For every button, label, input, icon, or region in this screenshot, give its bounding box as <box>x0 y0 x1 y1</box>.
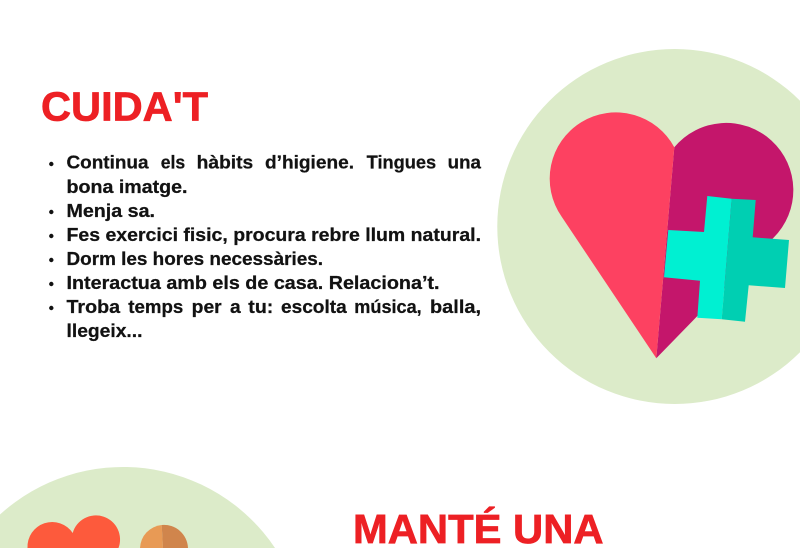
heart left half <box>550 112 674 358</box>
orange heart <box>27 515 120 548</box>
tip: interact: Interactua amb els de casa. Relaciona’t. <box>66 273 440 293</box>
tip: hygiene: una <box>448 153 482 173</box>
tip: time for yourself: per <box>192 297 222 317</box>
icon: bottom green circle with heart and head <box>0 467 275 548</box>
plus sign dark part <box>722 199 789 322</box>
heart right half <box>656 123 793 358</box>
tip: time for yourself: tu: <box>248 297 273 317</box>
tip: time for yourself: a <box>230 297 242 317</box>
tip: hygiene: els <box>161 153 185 173</box>
tip: time for yourself: temps <box>128 297 183 317</box>
tip: hygiene: hàbits <box>197 153 253 173</box>
green circle <box>0 467 275 548</box>
bullet list: self-care tips <box>49 153 482 341</box>
bullet markers <box>49 162 54 310</box>
tip: healthy food: Menja sa. <box>66 201 155 221</box>
tip: time for yourself: balla, <box>430 297 481 317</box>
tip: time for yourself: Troba <box>66 297 121 317</box>
tip: time for yourself: escolta <box>281 297 348 317</box>
tip: time for yourself: música, <box>354 297 422 317</box>
tip: hygiene: d’higiene. <box>265 153 354 173</box>
head right half <box>162 525 188 548</box>
icon: heart with plus on green circle <box>497 49 800 404</box>
tip: hygiene: Continua <box>66 153 150 173</box>
title: CUIDA'T: CUIDA'T <box>41 84 208 130</box>
tip: hygiene: Tingues <box>367 153 436 173</box>
plus sign light part <box>664 196 732 319</box>
tip: sleep: Dorm les hores necessàries. <box>66 249 323 269</box>
head left half <box>140 525 163 548</box>
green circle <box>497 49 800 404</box>
tip: exercise: Fes exercici fisic, procura rebre llum natural. <box>66 225 481 245</box>
tip: hygiene, second line: bona imatge. <box>66 177 188 197</box>
tip: time for yourself, second line: llegeix... <box>66 321 142 341</box>
